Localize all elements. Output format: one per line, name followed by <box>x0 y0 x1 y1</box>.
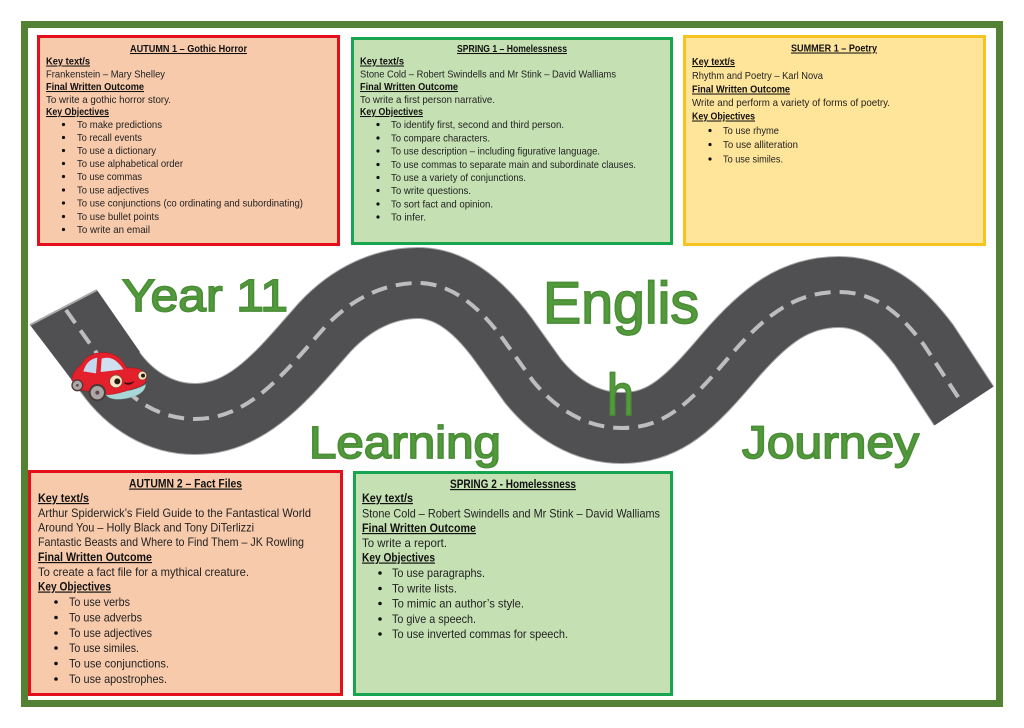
autumn 1 key texts: Key text/s <box>46 56 90 68</box>
summer 1 key texts: Rhythm and Poetry – Karl Nova <box>692 71 823 82</box>
road start flare <box>30 290 140 392</box>
panel: summer 1 <box>684 36 984 244</box>
autumn 2 box <box>30 472 342 694</box>
title: Journey: Journey <box>742 417 920 468</box>
spring 1 key texts: Key text/s <box>360 56 404 68</box>
spring 2 objectives: Key Objectives <box>362 550 435 564</box>
autumn 1 objectives: To use alphabetical order <box>77 159 183 170</box>
autumn 2 objectives: To use verbs <box>69 595 130 609</box>
autumn 2 key texts <box>38 491 311 549</box>
spring 1 heading: SPRING 1 – Homelessness <box>457 44 567 55</box>
autumn 2 objectives: To use conjunctions. <box>69 656 169 670</box>
spring 1 objectives: To use commas to separate main and subordinate clauses. <box>391 160 636 171</box>
autumn 2 key texts: Around You – Holly Black and Tony DiTerlizzi <box>38 520 254 534</box>
autumn 2 objectives: To use apostrophes. <box>69 672 167 686</box>
autumn 1 heading: AUTUMN 1 – Gothic Horror <box>130 44 247 55</box>
summer 1 key texts: Key text/s <box>692 57 735 68</box>
summer 1 objectives: To use alliteration <box>723 140 798 151</box>
autumn 1 objectives <box>46 107 303 236</box>
spring 1 objectives: To identify first, second and third person. <box>391 120 564 131</box>
summer 1 objectives: To use similes. <box>723 154 783 166</box>
panel: autumn 1 <box>38 36 338 244</box>
car body <box>72 353 147 395</box>
title: h: h <box>607 363 634 428</box>
car eye right <box>138 371 147 380</box>
spring 2 heading: SPRING 2 - Homelessness <box>450 477 576 491</box>
autumn 1 objectives: To use a dictionary <box>77 146 157 157</box>
autumn 2 objectives: Key Objectives <box>38 580 111 594</box>
title: Year 11: Year 11 <box>122 270 288 321</box>
spring 2 objectives: To mimic an author’s style. <box>392 596 524 610</box>
spring 2 box <box>354 472 672 694</box>
spring 2 outcome: Final Written Outcome <box>362 521 476 535</box>
autumn 1 outcome <box>46 82 171 106</box>
spring 1 box <box>352 38 672 244</box>
summer 1 heading: SUMMER 1 – Poetry <box>791 44 877 54</box>
road end edge <box>30 290 97 325</box>
autumn 1 outcome: Final Written Outcome <box>46 82 144 93</box>
spring 1 objectives: To compare characters. <box>391 134 490 144</box>
summer 1 box <box>684 36 984 244</box>
autumn 2 key texts: Key text/s <box>38 491 89 505</box>
spring 1 key texts: Stone Cold – Robert Swindells and Mr Stink – David Walliams <box>360 70 616 80</box>
summer 1 outcome: Final Written Outcome <box>692 84 790 96</box>
autumn 2 outcome: Final Written Outcome <box>38 550 152 564</box>
panel: spring 2 <box>354 472 672 694</box>
car bumper <box>105 384 146 399</box>
spring 1 objectives <box>360 107 636 224</box>
autumn 2 objectives: To use adjectives <box>69 626 152 640</box>
car front window <box>101 358 123 372</box>
spring 2 key texts: Stone Cold – Robert Swindells and Mr Stink – David Walliams <box>362 506 660 520</box>
icon: red cartoon car <box>71 353 147 401</box>
summer 1 key texts <box>692 57 823 82</box>
autumn 1 objectives: To use commas <box>77 172 142 183</box>
summer 1 objectives: To use rhyme <box>723 126 779 137</box>
autumn 1 objectives: Key Objectives <box>46 107 109 118</box>
autumn 2 outcome <box>38 550 249 579</box>
autumn 1 key texts <box>46 56 166 80</box>
spring 1 outcome: To write a first person narrative. <box>360 95 495 106</box>
autumn 2 heading: AUTUMN 2 – Fact Files <box>129 476 242 490</box>
spring 2 objectives <box>362 550 568 641</box>
autumn 1 outcome: To write a gothic horror story. <box>46 95 171 106</box>
autumn 1 box <box>38 36 338 244</box>
autumn 2 objectives: To use similes. <box>69 641 139 655</box>
spring 2 objectives: To write lists. <box>392 582 457 596</box>
autumn 2 outcome: To create a fact file for a mythical creature. <box>38 565 249 579</box>
summer 1 objectives: Key Objectives <box>692 112 755 122</box>
summer 1 outcome <box>692 84 890 109</box>
autumn 1 key texts: Frankenstein – Mary Shelley <box>46 70 166 80</box>
summer 1 outcome: Write and perform a variety of forms of poetry. <box>692 98 890 109</box>
autumn 1 objectives: To use conjunctions (co ordinating and subordinating) <box>77 198 303 210</box>
spring 1 objectives: To infer. <box>391 212 426 224</box>
road centre dashes <box>66 283 960 428</box>
car mouth <box>124 382 134 384</box>
autumn 1 objectives: To recall events <box>77 133 142 144</box>
road surface edge <box>85 283 964 428</box>
spring 2 objectives: To use inverted commas for speech. <box>392 627 568 641</box>
autumn 2 objectives <box>38 580 169 686</box>
autumn 1 objectives: To make predictions <box>77 120 162 131</box>
spring 2 key texts: Key text/s <box>362 491 413 505</box>
spring 2 objectives: To give a speech. <box>392 612 476 626</box>
car eye left <box>110 375 122 388</box>
spring 1 outcome: Final Written Outcome <box>360 82 458 93</box>
autumn 2 key texts: Arthur Spiderwick’s Field Guide to the Fantastical World <box>38 506 311 520</box>
road <box>30 283 964 428</box>
spring 2 key texts <box>362 491 660 520</box>
autumn 1 objectives: To use adjectives <box>77 186 149 196</box>
spring 1 objectives: To use description – including figurative language. <box>391 146 600 158</box>
spring 2 outcome: To write a report. <box>362 536 447 550</box>
spring 2 outcome <box>362 521 476 550</box>
summer 1 objectives <box>692 112 798 166</box>
car rear window <box>83 358 97 373</box>
autumn 2 objectives: To use adverbs <box>69 610 142 624</box>
spring 1 objectives: To use a variety of conjunctions. <box>391 173 526 184</box>
spring 2 objectives: To use paragraphs. <box>392 566 485 580</box>
autumn 1 objectives: To use bullet points <box>77 212 159 223</box>
car rear wheel <box>71 379 83 391</box>
spring 1 objectives: Key Objectives <box>360 107 423 118</box>
panel: autumn 2 <box>30 472 342 694</box>
spring 1 objectives: To sort fact and opinion. <box>391 200 493 210</box>
panel: spring 1 <box>352 38 672 244</box>
car front wheel <box>89 384 106 401</box>
spring 1 outcome <box>360 82 495 106</box>
road asphalt <box>85 283 964 428</box>
autumn 1 objectives: To write an email <box>77 225 150 236</box>
spring 1 objectives: To write questions. <box>391 186 471 197</box>
title: Englis: Englis <box>543 271 699 336</box>
title: Learning: Learning <box>309 417 501 468</box>
autumn 2 key texts: Fantastic Beasts and Where to Find Them – JK Rowling <box>38 535 304 549</box>
spring 1 key texts <box>360 56 616 80</box>
